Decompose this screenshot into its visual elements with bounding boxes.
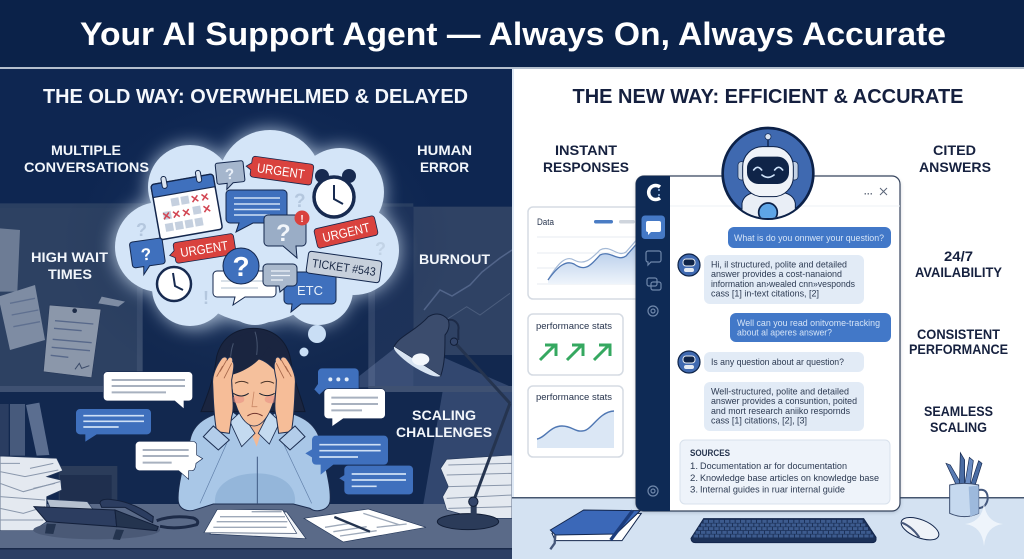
bubble blue dots: [314, 368, 359, 395]
label: availability: 24/7: [944, 248, 973, 264]
label: cited answers: CITED: [933, 142, 976, 158]
bot message 3: answer provides a consuntion, poited: [711, 395, 857, 406]
icon: question circle: ?: [232, 251, 250, 282]
label: scaling challenges: SCALING: [412, 407, 476, 423]
icon: ETC bubble: [284, 272, 336, 312]
office background: [0, 203, 512, 507]
bot avatar 1: [678, 254, 700, 276]
card: performance stats arrows: [528, 314, 623, 375]
card: performance stats arrows: performance stats: [536, 321, 613, 331]
icon: ETC bubble: ETC: [297, 283, 323, 298]
user message 2: about al aperes answer?: [737, 326, 832, 338]
faint marks: !: [203, 288, 209, 308]
faint marks: [136, 191, 386, 308]
label: seamless scaling: SEAMLESS: [924, 403, 993, 419]
icon: calendar: ×: [201, 200, 212, 217]
user message 1: [728, 227, 891, 248]
urgent tag 3: [168, 233, 236, 264]
sources box: SOURCES: [690, 448, 730, 458]
urgent tag 2: URGENT: [321, 220, 371, 245]
label: availability: AVAILABILITY: [915, 264, 1003, 280]
icon: calendar: [150, 168, 223, 240]
bot message 3: and mort research aniiko respornds: [711, 405, 850, 416]
bot message 3: cass [1] citations, [2], [3]: [711, 414, 807, 426]
faint marks: ?: [136, 220, 147, 240]
chat window: [636, 176, 900, 512]
icon: alert question bubble: [264, 210, 310, 258]
user message 2: Well can you read onitvome-tracking: [737, 317, 880, 328]
panel: old way: [0, 69, 512, 559]
thought dots: [300, 325, 326, 356]
icon: desk lamp: [394, 314, 510, 530]
icon: keyboard: [691, 519, 876, 543]
faint marks: ?: [294, 191, 306, 212]
icon: calendar: ×: [171, 205, 182, 222]
icon: question circle: [223, 248, 259, 284]
desk papers: [204, 509, 426, 542]
icon: grey small bubble: [263, 264, 297, 292]
icon: notebook: [550, 510, 641, 549]
icon: blue question bubble: [129, 238, 167, 276]
bubble white 1: [103, 372, 193, 409]
sources box: Internal guides in ruar internal guide: [700, 484, 845, 496]
urgent tag 1: [245, 155, 314, 185]
paper stack right: [441, 455, 512, 518]
icon: calendar: ×: [189, 190, 200, 207]
bot message 1: answer provides a cost-nanaiond: [711, 268, 842, 279]
icon: alarm clock: [314, 169, 356, 217]
heading: new way: THE NEW WAY: EFFICIENT & ACCURATE: [572, 86, 964, 108]
bot message 1: cass [1] in-text citations, [2]: [711, 288, 819, 298]
label: instant responses: INSTANT: [555, 142, 617, 158]
robot avatar: [723, 128, 813, 222]
sources box: Knowledge base articles on knowledge base: [700, 473, 879, 484]
icon: blue question bubble: ?: [140, 244, 153, 265]
bot message 3: [704, 382, 864, 431]
bubble white 2: [135, 441, 203, 479]
icon: alert question bubble: ?: [276, 220, 291, 247]
sources box: 1.: [690, 461, 698, 472]
sources box: [680, 440, 890, 504]
chart on wall: [424, 250, 512, 310]
card: data chart: Data: [537, 217, 554, 227]
card: data chart: [528, 207, 648, 299]
faint marks: ?: [375, 239, 386, 259]
label: high wait times: TIMES: [48, 266, 92, 282]
sources box: 2.: [690, 473, 698, 484]
card: performance stats line: [528, 386, 623, 457]
user message 2: [730, 313, 891, 342]
label: multiple conversations: MULTIPLE: [51, 142, 121, 158]
icon: calendar: ×: [161, 207, 172, 224]
bubble blue 3: [339, 465, 413, 495]
label: cited answers: ANSWERS: [919, 159, 991, 175]
card: performance stats line: performance stats: [536, 392, 613, 402]
title: Your AI Support Agent — Always On, Always Accurate: [80, 16, 946, 52]
window controls: [864, 188, 887, 199]
thought cloud: [114, 130, 399, 356]
paper stack left: [0, 456, 63, 531]
ticket tag: TICKET #543: [311, 256, 377, 279]
label: high wait times: HIGH WAIT: [31, 249, 108, 265]
icon: alert question bubble: !: [300, 214, 304, 225]
icon: white bubble: [213, 271, 276, 305]
bubble blue 1: [76, 409, 151, 442]
icon: desk phone: [33, 499, 198, 540]
label: multiple conversations: CONVERSATIONS: [24, 159, 149, 175]
pinned papers: [0, 228, 125, 378]
bubble white 3: [324, 389, 385, 427]
window controls: ···: [864, 189, 873, 199]
icon: grey question bubble: [215, 161, 246, 190]
bot message 1: Hi, il structured, polite and detailed: [711, 258, 847, 270]
label: consistent performance: CONSISTENT: [917, 326, 1000, 342]
icon: active chat: [642, 216, 665, 239]
urgent tag 1: URGENT: [256, 160, 306, 182]
icons: nav: [646, 251, 661, 496]
desk: [0, 504, 512, 559]
icon: grey question bubble: ?: [224, 166, 235, 183]
label: consistent performance: PERFORMANCE: [909, 341, 1008, 357]
bot message 2: Is any question about ar question?: [711, 356, 844, 367]
desk surface: [512, 497, 1024, 559]
bot message 2: [704, 352, 864, 372]
header banner: [0, 0, 1024, 69]
label: human error: HUMAN: [417, 142, 472, 158]
sources box: Documentation ar for documentation: [700, 461, 847, 472]
person: stressed woman: [178, 328, 330, 511]
user message 1: What is do you onnwer your question?: [734, 232, 884, 243]
bot message 3: Well-structured, polite and detailed: [711, 386, 849, 396]
chat bubbles around woman: [76, 368, 413, 495]
bot message 1: [704, 255, 864, 304]
icon: mouse: [898, 513, 942, 545]
icon: pen mug: [946, 453, 988, 517]
ticket tag: [306, 251, 382, 283]
sparkle watermark: [965, 503, 1003, 546]
heading: old way: THE OLD WAY: OVERWHELMED & DELAYED: [43, 86, 468, 108]
label: seamless scaling: SCALING: [930, 419, 987, 435]
icon: logo: [649, 186, 660, 199]
label: human error: ERROR: [420, 159, 469, 175]
sources box: 3.: [690, 484, 698, 496]
icon: blue message bubble: [226, 190, 287, 232]
label: scaling challenges: CHALLENGES: [396, 424, 492, 440]
panel: new way: [512, 69, 1024, 559]
bot avatar 2: [678, 351, 700, 373]
binders: [0, 403, 117, 506]
label: instant responses: RESPONSES: [543, 159, 629, 175]
bubble blue 2: [305, 436, 388, 475]
sidebar: [636, 176, 670, 511]
icon: calendar: ×: [199, 188, 210, 205]
label: burnout: BURNOUT: [419, 251, 490, 267]
icon: calendar: ×: [181, 203, 192, 221]
halo behind cloud: [63, 90, 453, 390]
bot message 1: information an›wealed cnn»vesponds: [711, 278, 855, 289]
icon: wall clock: [157, 267, 191, 301]
urgent tag 3: URGENT: [179, 238, 229, 260]
